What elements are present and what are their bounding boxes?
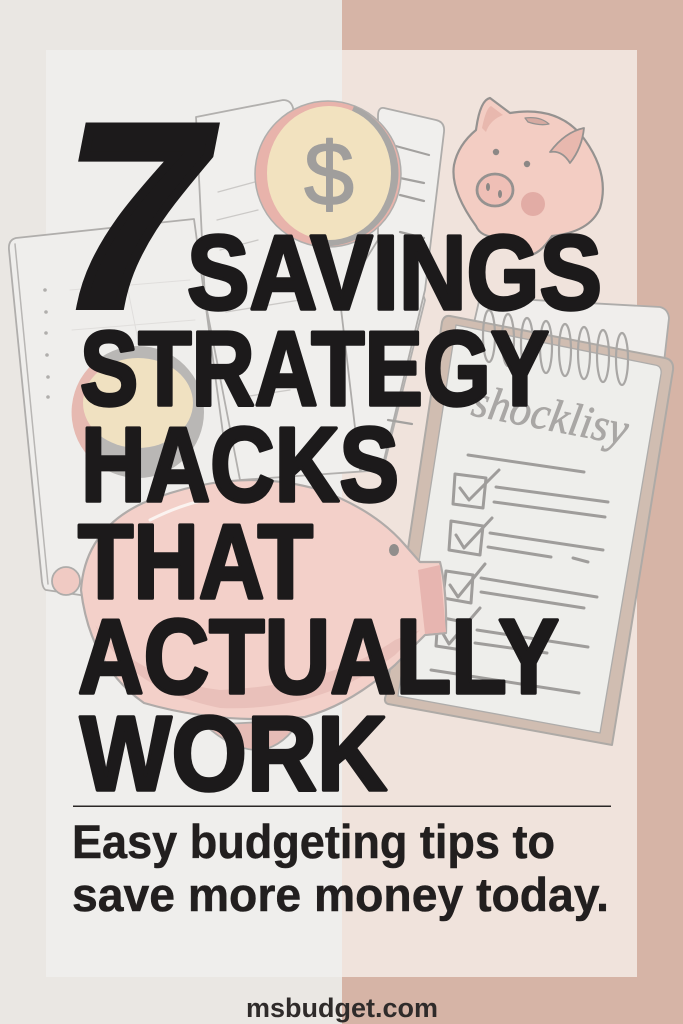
title line: ACTUALLY: ACTUALLY bbox=[78, 598, 559, 716]
spiral binding bbox=[483, 310, 628, 385]
handwritten heading: shocklisy bbox=[468, 375, 633, 455]
icon: large piggy bank bbox=[52, 480, 446, 750]
checklist items bbox=[431, 455, 608, 693]
illustration: checklist clipboard bbox=[385, 310, 673, 745]
title line: STRATEGY: STRATEGY bbox=[80, 310, 549, 428]
icon: partial coin bbox=[72, 346, 204, 478]
subtitle line 1: Easy budgeting tips to bbox=[72, 815, 555, 868]
panel: translucent card bbox=[46, 50, 637, 977]
subtitle line 2: save more money today. bbox=[72, 868, 609, 921]
illustration: left notebook bbox=[9, 219, 250, 620]
title line: SAVINGS: SAVINGS bbox=[187, 214, 602, 332]
illustration: finance collage bbox=[9, 98, 673, 750]
title bbox=[33, 72, 602, 813]
subtitle bbox=[72, 815, 609, 921]
title numeral: 7: 7 bbox=[33, 72, 236, 360]
title line: THAT: THAT bbox=[78, 503, 313, 621]
icon: small piggy bank bbox=[453, 98, 603, 256]
paper sheet bbox=[398, 325, 661, 733]
title line: WORK: WORK bbox=[80, 695, 387, 813]
icon: dollar coin: $ bbox=[304, 125, 354, 225]
illustration: right receipt bbox=[340, 108, 444, 470]
illustration: back sheet bbox=[470, 297, 669, 380]
title line: HACKS: HACKS bbox=[81, 406, 399, 524]
clipboard board bbox=[385, 316, 673, 745]
divider rule bbox=[73, 806, 611, 807]
website footer: msbudget.com bbox=[246, 993, 438, 1023]
icon: dollar coin bbox=[255, 101, 401, 247]
illustration: center receipt bbox=[196, 100, 425, 480]
